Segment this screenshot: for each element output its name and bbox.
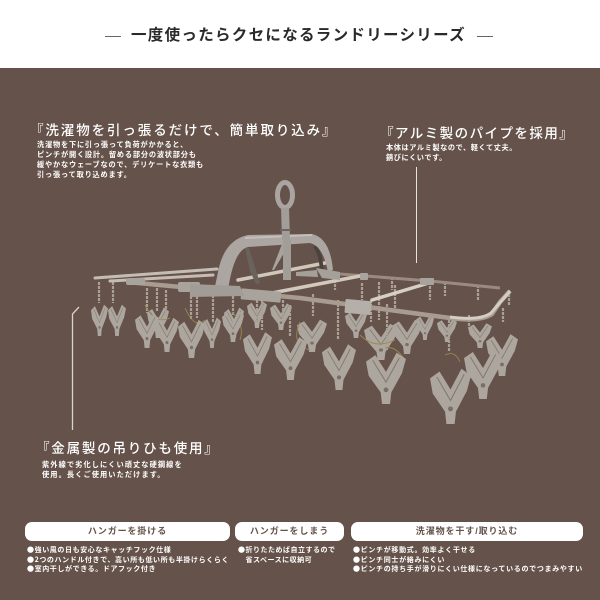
- text block: metal cord: 紫外線で劣化しにくい頑丈な硬鋼線を: [42, 460, 183, 469]
- hanger hub arch: [190, 234, 340, 297]
- front clips: [91, 305, 502, 424]
- text block: aluminium pipe: 本体はアルミ製なので、軽くて丈夫。: [386, 143, 517, 152]
- text block: metal cord: [42, 460, 183, 479]
- list: dry and take in: ●ピンチが移動式。効率よく干せる: [353, 545, 476, 555]
- pill: hang the hanger: ハンガーを掛ける: [88, 526, 167, 536]
- text block: pull to take in: 引っ張って取り込めます。: [37, 170, 132, 179]
- left pipes: [95, 262, 432, 300]
- list: hang the hanger: ●強い風の日も安心なキャッチフック仕様: [27, 545, 171, 555]
- text block: pull to take in: 洗濯物を下に引っ張って負荷がかかると、: [37, 140, 188, 149]
- far pipe: [340, 274, 500, 288]
- text block: pull to take in: [37, 140, 204, 179]
- hanger hook ring: [278, 182, 292, 240]
- pill: dry and take in: 洗濯物を干す/取り込む: [416, 526, 518, 536]
- pill: dry and take in: [351, 522, 583, 541]
- text block: pull to take in: 緩やかなウェーブなので、デリケートな衣類も: [37, 160, 204, 169]
- list: dry and take in: [353, 545, 583, 574]
- text block: pull to take in: ピンチが開く設計。留める部分の波状部分も: [37, 150, 197, 159]
- list: hang the hanger: [27, 545, 229, 574]
- heading: metal cord: 『金属製の吊りひも使用』: [36, 441, 220, 456]
- wire accents: [145, 305, 460, 362]
- pill: store the hanger: [235, 522, 344, 541]
- text block: aluminium pipe: 錆びにくいです。: [386, 153, 447, 162]
- list: dry and take in: ●ピンチ同士が絡みにくい: [353, 554, 445, 564]
- list: store the hanger: ●折りたためば自立するので: [238, 545, 336, 555]
- list: store the hanger: [238, 545, 336, 564]
- hanging links: [99, 276, 509, 352]
- list: store the hanger: 省スペースに収納可: [245, 554, 312, 564]
- title: 一度使ったらクセになるランドリーシリーズ: [131, 27, 466, 44]
- heading: aluminium pipe: 『アルミ製のパイプを採用』: [380, 126, 574, 141]
- heading: pull to take in: 『洗濯物を引っ張るだけで、簡単取り込み』: [30, 123, 337, 138]
- back clips: [147, 301, 518, 376]
- pill: hang the hanger: [25, 522, 230, 541]
- pill: store the hanger: ハンガーをしまう: [250, 526, 329, 536]
- pipe joints: [126, 273, 434, 315]
- leader line: aluminium pipe: [416, 167, 417, 263]
- front pipe: [127, 282, 510, 319]
- list: dry and take in: ●ピンチの持ち手が滑りにくい仕様になっているのでつまみやすい: [353, 564, 583, 574]
- leader line: metal cord: [72, 306, 80, 430]
- text block: metal cord: 使用。長くご使用いただけます。: [42, 470, 166, 479]
- text block: aluminium pipe: [386, 143, 517, 162]
- list: hang the hanger: ●室内干しができる。ドアフック付き: [27, 564, 156, 574]
- list: hang the hanger: ●2つのハンドル付きで、高い所も低い所も半掛けらくらく: [27, 554, 229, 564]
